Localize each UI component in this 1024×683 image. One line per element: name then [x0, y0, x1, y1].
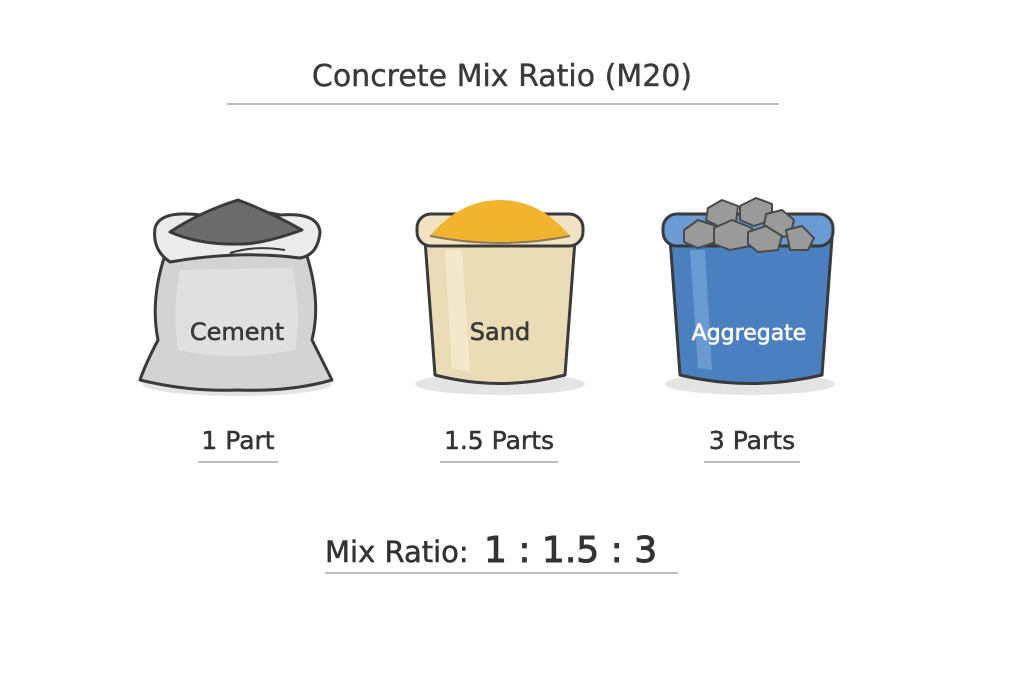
mix ratio — [325, 530, 678, 574]
icon: cement bag — [140, 200, 332, 396]
title: Concrete Mix Ratio (M20) — [312, 59, 692, 94]
icon: sand bucket — [415, 200, 585, 395]
icon: aggregate bucket — [663, 198, 835, 395]
mix ratio: Mix Ratio: — [325, 535, 469, 569]
mix ratio: 1 : 1.5 : 3 — [484, 530, 657, 571]
label: 1.5 parts: 1.5 Parts — [444, 426, 554, 455]
icon: aggregate bucket: Aggregate — [692, 321, 806, 346]
label: 3 parts: 3 Parts — [709, 426, 795, 455]
icon: cement bag: Cement — [190, 318, 284, 346]
label: 1 part: 1 Part — [201, 426, 275, 455]
icon: sand bucket: Sand — [470, 318, 530, 346]
